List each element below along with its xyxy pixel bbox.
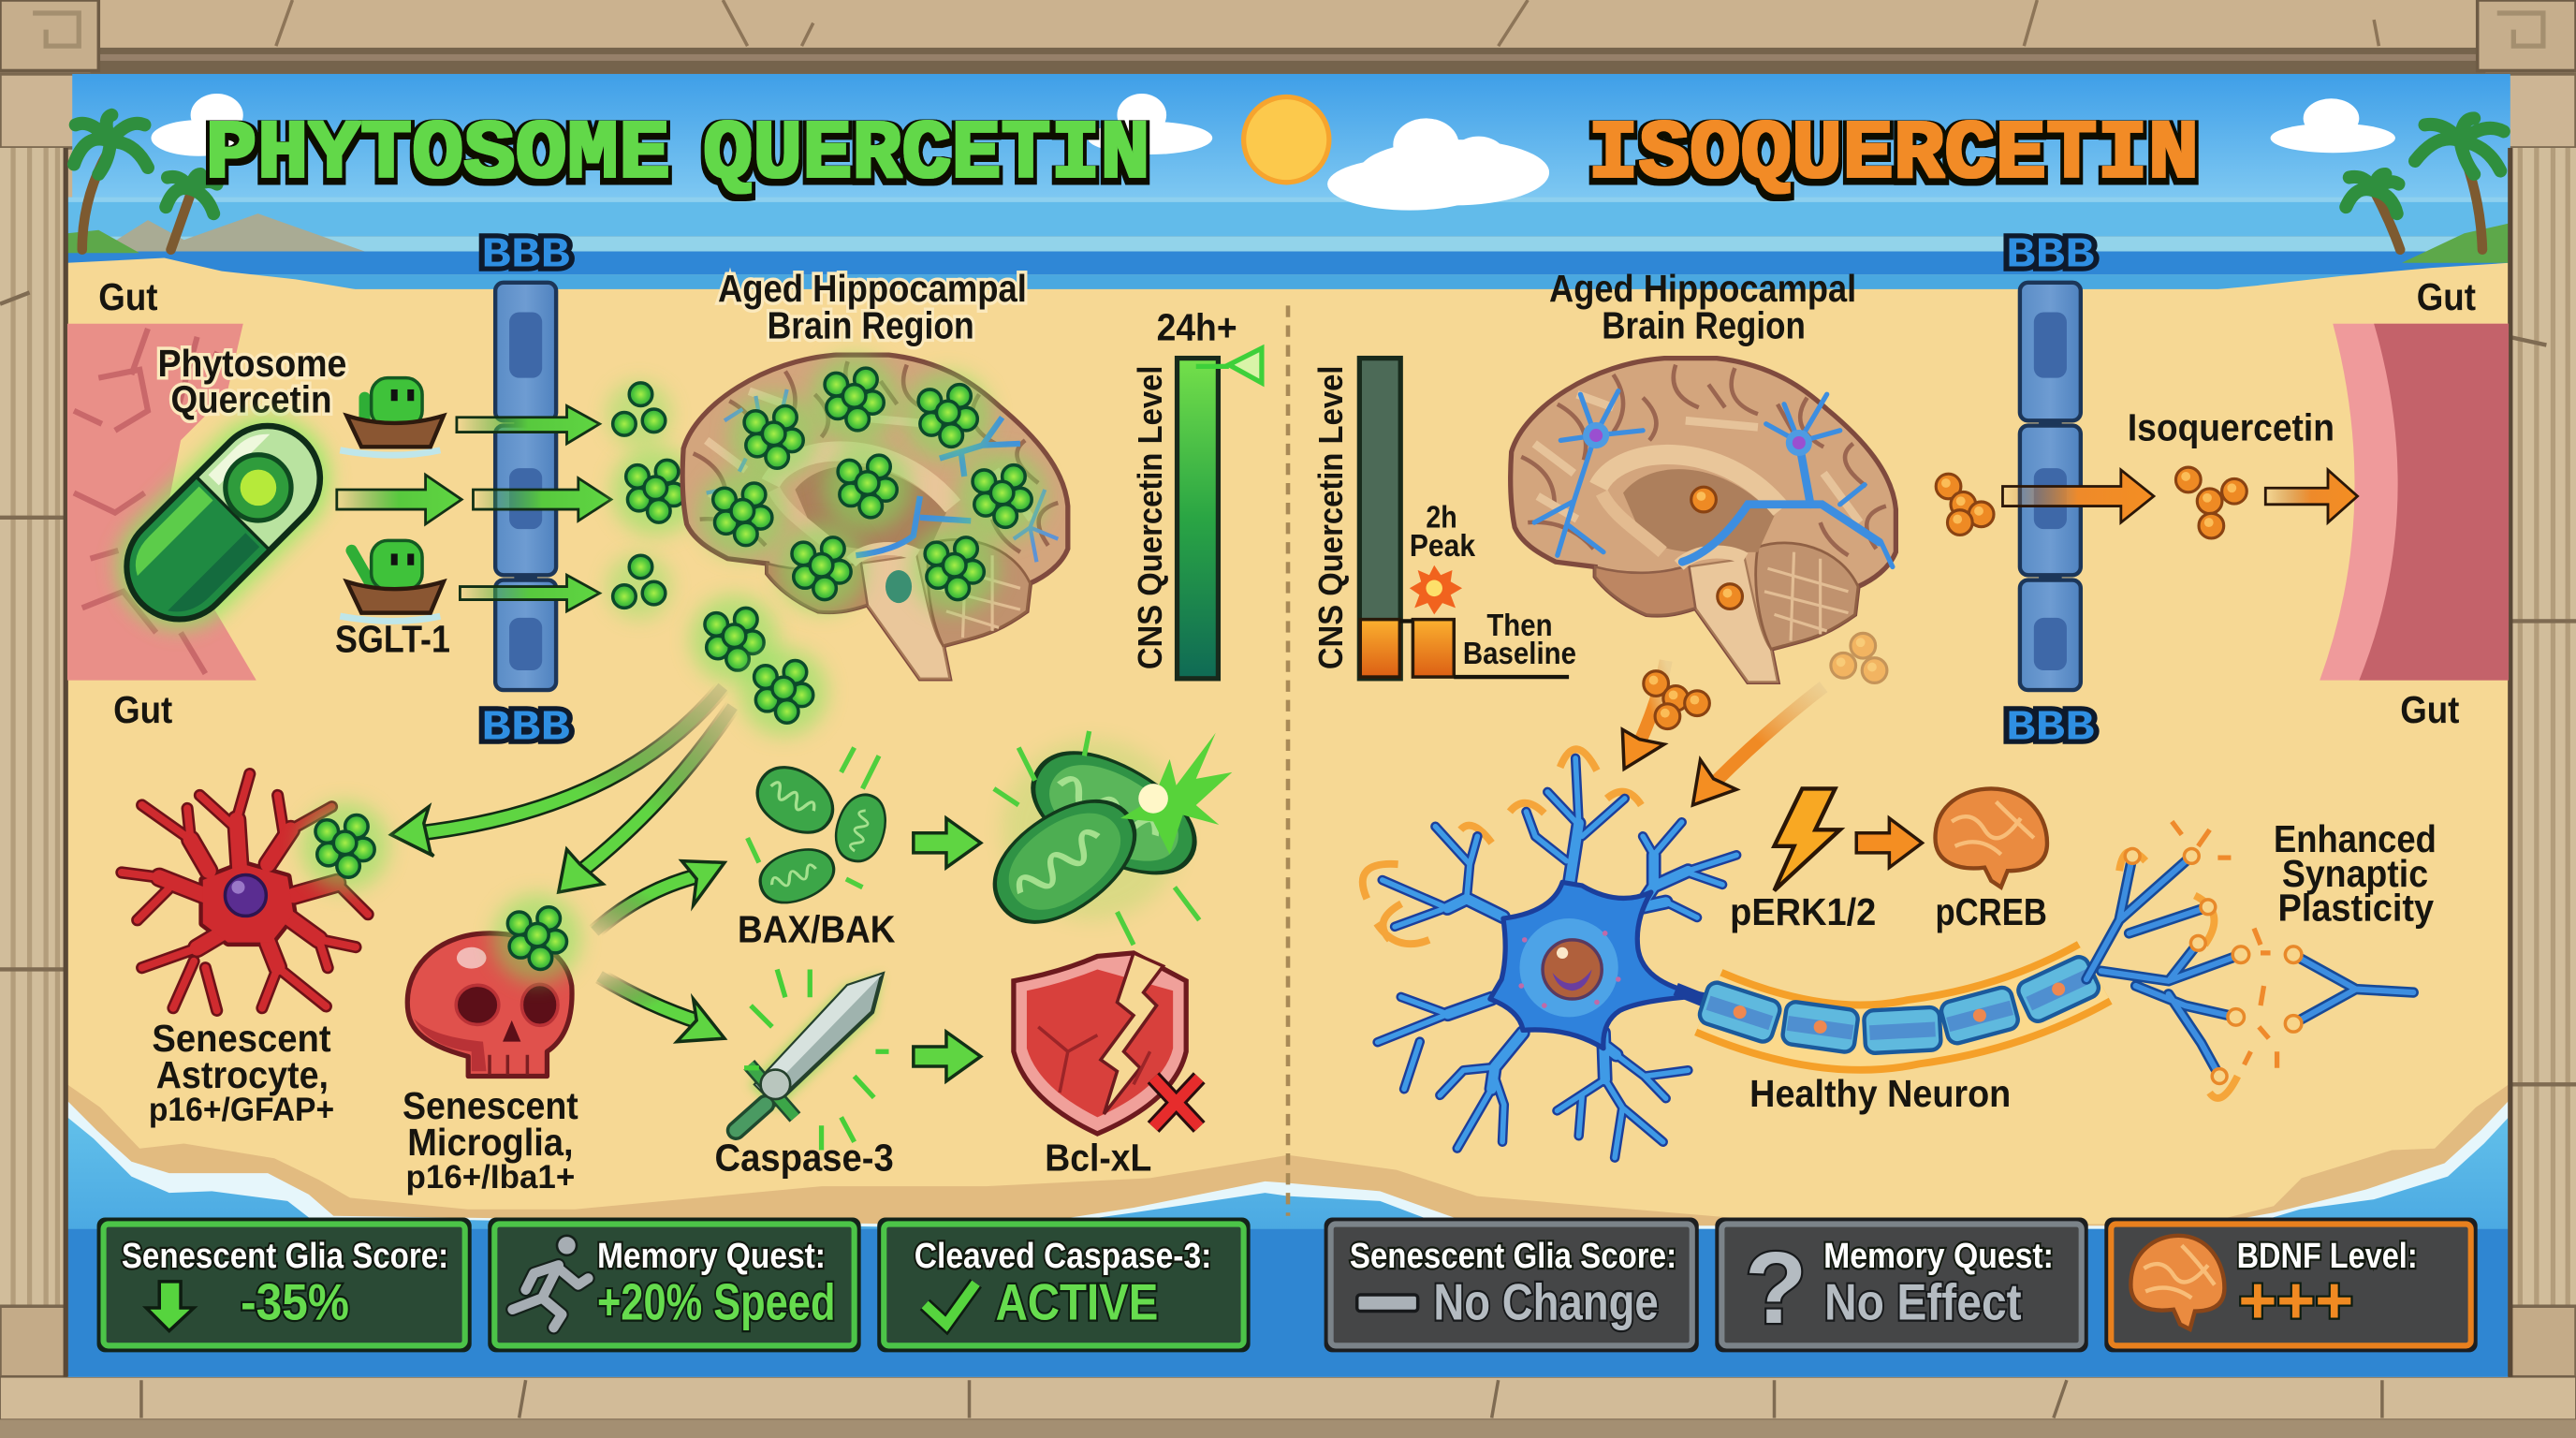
BBB barrier: left: BBB (481, 704, 570, 753)
arrows: green to glia and mitochondria (391, 687, 733, 1042)
label: Caspase-3: Caspase-3 (714, 1136, 894, 1179)
stat card: senescent glia no change: Senescent Glia Score: (1350, 1236, 1676, 1275)
gut: right (2320, 324, 2509, 681)
stat card: BDNF level +++: +++ (2238, 1263, 2353, 1337)
icon: BDNF brain (2130, 1236, 2224, 1329)
label: senescent astrocyte: Senescent (152, 1017, 331, 1060)
label: enhanced synaptic plasticity: Enhanced (2274, 817, 2437, 860)
gut labels (98, 275, 2476, 731)
label: Phytosome Quercetin (157, 342, 346, 421)
icon: SGLT-1 boat top (340, 378, 444, 455)
label: aged hippocampal left: Brain Region (768, 304, 974, 347)
BBB barrier: left: BBB (481, 230, 570, 279)
gut labels: Gut (98, 275, 157, 318)
icon: phytosome capsule (91, 390, 356, 655)
dashed divider (1287, 305, 1289, 1216)
stat card: senescent glia no change (1325, 1217, 1699, 1352)
arrows: green through BBB (337, 405, 611, 611)
label: aged hippocampal left: Aged Hippocampal (718, 267, 1027, 310)
stat card: BDNF level +++ (2104, 1217, 2478, 1352)
label: enhanced synaptic plasticity: Synaptic (2282, 852, 2428, 895)
stat card: memory quest no effect: ? (1745, 1231, 1808, 1345)
healthy neuron (1363, 749, 2413, 1158)
wet sand and water (67, 1084, 2509, 1377)
icon: senescent astrocyte (122, 774, 389, 1010)
clouds (151, 94, 2395, 211)
palm trees (74, 115, 2504, 250)
icon: senescent microglia skull (407, 894, 581, 1077)
stat card: senescent glia -35%: Senescent Glia Score: (122, 1236, 448, 1275)
label: pERK1/2: pERK1/2 (1730, 890, 1876, 933)
gut labels: Gut (2417, 275, 2476, 318)
synaptic terminals (2125, 848, 2302, 1083)
title: Isoquercetin: ISOQUERCETIN (1588, 110, 2199, 202)
brain: phytosome with clusters (682, 355, 1068, 679)
label: SGLT-1: SGLT-1 (335, 618, 450, 661)
label: senescent astrocyte: Astrocyte, (156, 1053, 329, 1096)
icon: damaged mitochondria (974, 731, 1232, 945)
myelin segments (1697, 954, 2101, 1053)
myelin sheath glow (1708, 973, 2095, 1037)
label: Isoquercetin: Isoquercetin (2128, 405, 2334, 448)
stat card: memory quest no effect: Memory Quest: (1823, 1236, 2054, 1275)
label: Phytosome Quercetin: Phytosome (157, 342, 346, 385)
label: enhanced synaptic plasticity: Plasticity (2277, 887, 2435, 930)
stat card: cleaved caspase-3 active: ACTIVE (996, 1273, 1158, 1330)
icon: broken Bcl-xL shield (1014, 953, 1199, 1134)
label: aged hippocampal left (718, 267, 1027, 347)
label: aged hippocampal right: Brain Region (1602, 304, 1806, 347)
chart: CNS quercetin level sustained (1131, 305, 1262, 679)
BBB barrier: right (2006, 230, 2095, 753)
label: pCREB: pCREB (1936, 890, 2047, 933)
stat card: memory quest +20% speed: +20% Speed (597, 1273, 835, 1330)
label: senescent astrocyte (149, 1017, 334, 1128)
gut: left (67, 324, 256, 681)
label: BAX/BAK: BAX/BAK (738, 908, 896, 951)
chart: CNS quercetin level transient (1311, 359, 1576, 679)
stat card: senescent glia -35%: -35% (241, 1273, 349, 1330)
icon: SGLT-1 boat bottom (340, 540, 444, 621)
chart: CNS quercetin level transient: 2h (1426, 500, 1457, 535)
label: senescent microglia: p16+/Iba1+ (406, 1159, 575, 1196)
brain: isoquercetin with neurons (1511, 359, 1895, 682)
stat card: senescent glia no change: No Change (1433, 1273, 1659, 1330)
BBB barrier: left (481, 230, 570, 753)
stat card: memory quest no effect: No Effect (1824, 1273, 2022, 1330)
label: senescent astrocyte: p16+/GFAP+ (149, 1092, 334, 1128)
label: aged hippocampal right: Aged Hippocampal (1549, 267, 1856, 310)
arrow: to damaged mitochondria (914, 818, 981, 868)
icon: runner (513, 1236, 588, 1328)
chart: CNS quercetin level sustained: 24h+ (1157, 305, 1237, 348)
gut labels: Gut (113, 688, 172, 731)
stat card: memory quest no effect (1715, 1217, 2088, 1352)
stat card: memory quest +20% speed: Memory Quest: (597, 1236, 826, 1275)
chart: CNS quercetin level transient: Baseline (1463, 637, 1576, 671)
title: Phytosome Quercetin: QUERCETIN (703, 110, 1150, 202)
isoquercetin clusters and arrows (1936, 467, 2358, 538)
icon: pERK lightning bolt (1775, 788, 1840, 890)
stat card: senescent glia -35% (97, 1217, 472, 1352)
title: Phytosome Quercetin: PHYTOSOME (205, 110, 670, 202)
label: senescent microglia: Microglia, (407, 1121, 574, 1164)
stat card: BDNF level +++: BDNF Level: (2237, 1236, 2418, 1275)
icon: small mitochondria (747, 748, 892, 911)
sun (1244, 97, 1329, 183)
label: Bcl-xL: Bcl-xL (1045, 1136, 1151, 1179)
label: senescent microglia (402, 1084, 578, 1196)
BBB barrier: right: BBB (2006, 230, 2095, 279)
arrow: to Bcl-xL (914, 1032, 981, 1081)
stat card: cleaved caspase-3 active (877, 1217, 1251, 1352)
label: enhanced synaptic plasticity (2274, 817, 2437, 930)
arrow: pERK to pCREB (1856, 818, 1922, 868)
soma (1490, 882, 1708, 1049)
chart: CNS quercetin level sustained: CNS Quercetin Level (1131, 365, 1169, 669)
BBB barrier: right: BBB (2006, 704, 2095, 753)
label: senescent microglia: Senescent (402, 1084, 578, 1127)
stat card: memory quest +20% speed (488, 1217, 861, 1352)
label: Phytosome Quercetin: Quercetin (171, 378, 332, 421)
icon: pCREB brain (1936, 788, 2047, 888)
title: Phytosome Quercetin (205, 110, 1150, 202)
quercetin clusters free (607, 381, 828, 736)
orange glows on dendrite tips (1363, 749, 2237, 1098)
stat card: cleaved caspase-3 active: Cleaved Caspase-3: (915, 1236, 1211, 1275)
chart: CNS quercetin level transient: Peak (1410, 529, 1475, 564)
chart: CNS quercetin level transient: CNS Quercetin Level (1311, 365, 1350, 669)
icon: caspase-3 sword (736, 969, 889, 1151)
label: aged hippocampal right (1549, 267, 1856, 347)
gut labels: Gut (2400, 688, 2459, 731)
isoquercetin entering neuron (1622, 633, 1887, 805)
chart: CNS quercetin level transient: Then (1486, 609, 1553, 643)
label: Healthy Neuron: Healthy Neuron (1749, 1072, 2011, 1115)
